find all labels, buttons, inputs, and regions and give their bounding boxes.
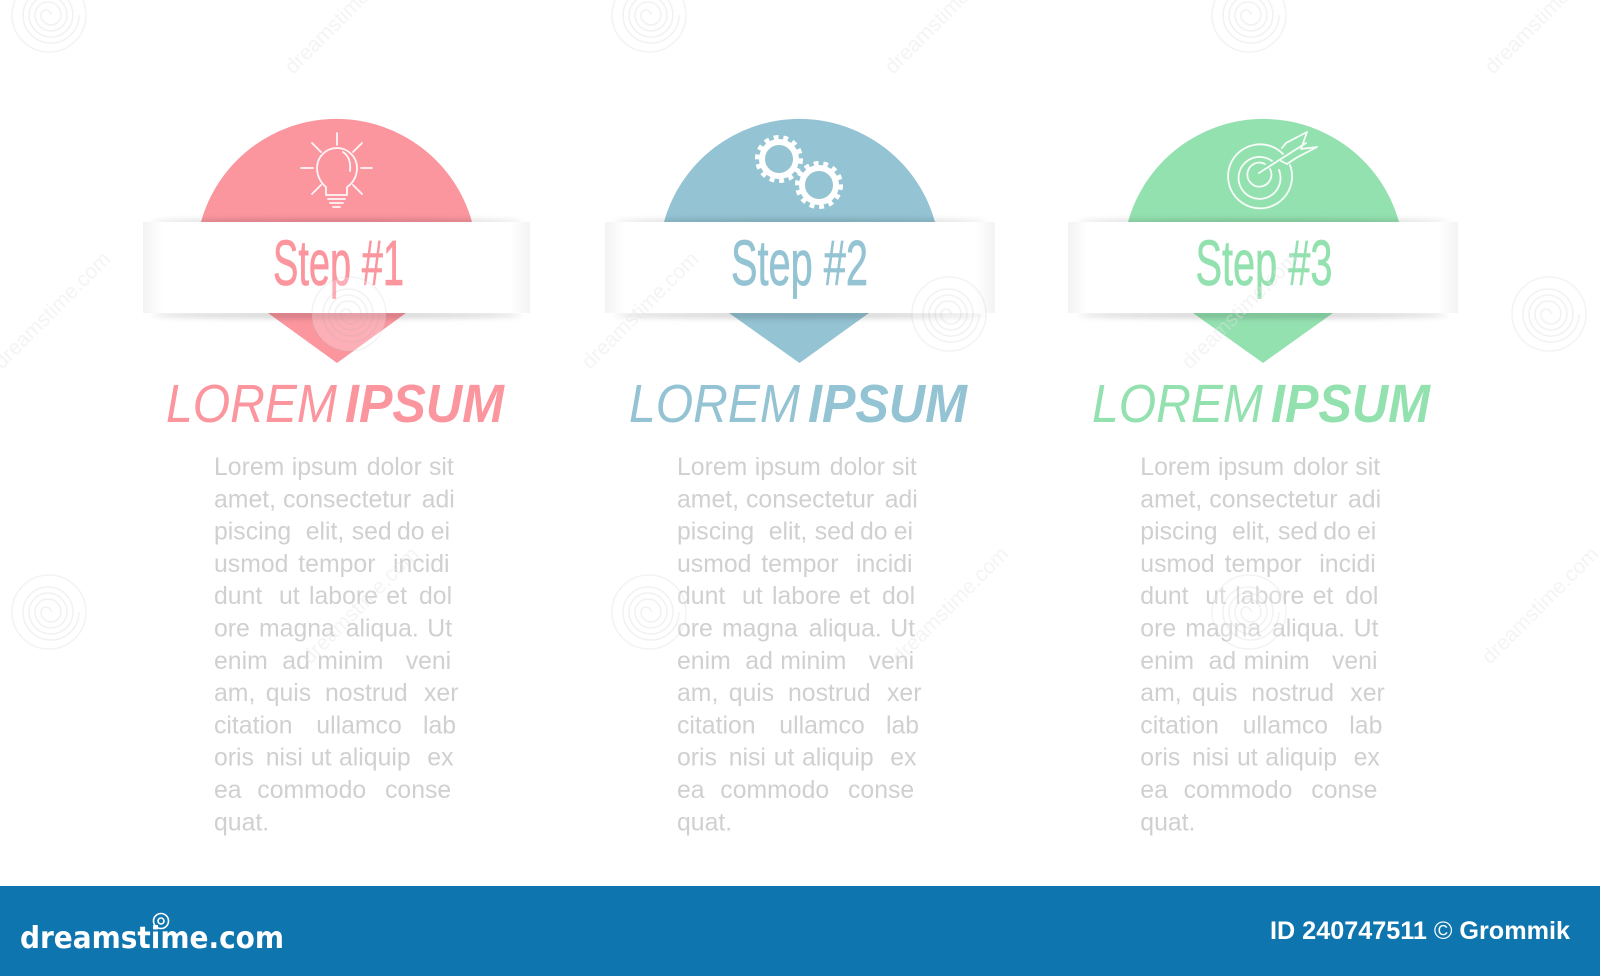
text block: step 3 body: enim [1140, 648, 1194, 675]
ribbon label: Step #2: Step #2 [731, 227, 868, 299]
text block: step 1 body: conse [385, 777, 451, 804]
text block: step 2 body: tempor [761, 551, 838, 578]
ribbon [605, 222, 995, 313]
ribbon shadows [152, 219, 522, 318]
text block: step 1 body: oris [214, 745, 254, 772]
text block: step 2 body: et [849, 583, 870, 610]
text block: step 3 body: quis [1192, 680, 1238, 707]
text block: step 2 body: enim [677, 648, 731, 675]
heading: step 1: IPSUM [345, 374, 505, 434]
text block: step 2 body: dol [882, 583, 915, 610]
text block: step 2 body: ut [774, 745, 794, 772]
watermark overlay: dreamstime.com [887, 543, 1013, 669]
panel: step 1 badge [143, 119, 530, 363]
text block: step 3 body: amet, [1140, 486, 1202, 513]
text block: step 3 body: dunt [1140, 583, 1189, 610]
text block: step 1 body: ei [431, 519, 450, 546]
text block: step 1 body: labore [309, 583, 378, 610]
text block: step 1 body: commodo [257, 777, 366, 804]
text block: step 3 body: consectetur [1209, 486, 1337, 513]
text block: step 1 body: usmod [214, 551, 288, 578]
text block: step 2 body: nisi [729, 745, 766, 772]
text block: step 1 body: ore [214, 616, 250, 642]
text block: step 2 body: labore [772, 583, 841, 610]
text block: step 1 body: lab [423, 712, 456, 739]
text block: step 1 body: am, [214, 680, 255, 707]
text block: step 1 body: sit [429, 454, 454, 481]
text block: step 1 body: ipsum [292, 454, 358, 481]
text block: step 2 body: consectetur [746, 486, 874, 513]
text block: step 2 body: nostrud [788, 680, 871, 707]
footer credit: ID 240747511 © Grommik [1270, 917, 1570, 945]
text block: step 3 body: sit [1355, 454, 1380, 481]
text block: step 3 body: dolor [1293, 454, 1348, 481]
text block: step 2 body: ei [894, 519, 913, 546]
watermark overlay: dreamstime.com [297, 543, 423, 669]
text block: step 1 body: amet, [214, 486, 276, 513]
ribbon shadows [615, 219, 985, 318]
text block: step 2 body [677, 454, 921, 836]
text block: step 3 body: incidi [1319, 551, 1376, 578]
text block: step 1 body: quis [266, 680, 311, 707]
text block: step 1 body: incidi [393, 551, 450, 578]
badge shape: pink circle segment and pointer [201, 119, 472, 363]
text block: step 1 body: ex [427, 745, 454, 772]
text block: step 2 body: ea [677, 777, 705, 804]
text block: step 3 body: aliqua. [1272, 616, 1345, 642]
text block: step 2 body: quis [729, 680, 774, 707]
text block: step 2 body: ore [677, 616, 713, 642]
badge shape: blue circle segment and pointer [664, 119, 935, 363]
heading: step 2 [629, 374, 968, 434]
footer bar [0, 886, 1600, 976]
text block: step 3 body: commodo [1184, 777, 1292, 804]
text block: step 3 body: nisi [1192, 745, 1229, 772]
text block: step 1 body: do [397, 519, 425, 546]
text block: step 3 body: adi [1348, 486, 1381, 513]
text block: step 2 body: quat. [677, 809, 732, 836]
text block: step 2 body: amet, [677, 486, 739, 513]
text block: step 2 body: oris [677, 745, 717, 772]
text block: step 1 body: dol [419, 583, 452, 610]
text block: step 2 body: aliqua. [809, 616, 882, 642]
text block: step 1 body: piscing [214, 519, 291, 546]
text block: step 3 body: ex [1354, 745, 1380, 772]
text block: step 2 body: sed [815, 519, 855, 546]
panel: step 2 badge [605, 119, 995, 363]
text block: step 2 body: xer [887, 680, 921, 707]
text block: step 3 body: usmod [1140, 551, 1215, 578]
text block: step 3 body: veni [1332, 648, 1378, 675]
ribbon shadows [1078, 219, 1448, 318]
text block: step 1 body: nostrud [325, 680, 408, 707]
footer logo: dreamstime.com [20, 921, 284, 956]
text block: step 1 body: minim [317, 648, 383, 675]
watermark overlay [0, 0, 1600, 669]
text block: step 1 body: tempor [298, 551, 375, 578]
text block: step 2 body: veni [869, 648, 914, 675]
text block: step 2 body: Ut [890, 616, 915, 642]
text block: step 3 body: do [1323, 519, 1351, 546]
text block: step 3 body: et [1313, 583, 1333, 610]
text block: step 1 body: ad [282, 648, 310, 675]
text block: step 2 body: magna [722, 616, 798, 642]
text block: step 3 body: am, [1140, 680, 1182, 707]
text block: step 1 body: xer [424, 680, 458, 707]
text block: step 3 body: xer [1350, 680, 1385, 707]
text block: step 1 body: ut [279, 583, 300, 610]
text block: step 1 body: dunt [214, 583, 262, 610]
watermark overlay: dreamstime.com [1477, 543, 1600, 669]
text block: step 1 body: nisi [266, 745, 303, 772]
text block: step 3 body: piscing [1140, 519, 1218, 546]
text block: step 2 body: elit, [769, 519, 807, 546]
text block: step 2 body: ex [890, 745, 917, 772]
text block: step 2 body: piscing [677, 519, 754, 546]
text block: step 2 body: adi [885, 486, 918, 513]
text block: step 2 body: dolor [830, 454, 885, 481]
text block: step 2 body: ut [742, 583, 763, 610]
text block: step 3 body: dol [1345, 583, 1378, 610]
text block: step 3 body: ea [1140, 777, 1168, 804]
text block: step 3 body: ad [1209, 648, 1236, 675]
text block: step 2 body: dunt [677, 583, 725, 610]
text block: step 3 body: citation [1140, 712, 1219, 739]
heading: step 1 [166, 374, 505, 434]
text block: step 2 body: do [860, 519, 888, 546]
text block: step 3 body: ore [1140, 616, 1176, 642]
text block: step 3 body: sed [1278, 519, 1318, 546]
text block: step 2 body: ullamco [779, 712, 865, 739]
text block: step 3 body: elit, [1232, 519, 1271, 546]
text block: step 1 body: Lorem [214, 454, 284, 481]
panel: step 3 badge [1068, 119, 1458, 363]
text block: step 3 body: Lorem [1140, 454, 1211, 481]
text block: step 1 body: consectetur [283, 486, 411, 513]
text block: step 1 body [214, 454, 458, 836]
ribbon [1068, 222, 1458, 313]
text block: step 1 body: ea [214, 777, 242, 804]
text block: step 3 body: tempor [1225, 551, 1302, 578]
text block: step 2 body: conse [848, 777, 914, 804]
icon: target with arrow [1228, 132, 1317, 208]
text block: step 3 body: minim [1244, 648, 1310, 675]
text block: step 2 body: sit [892, 454, 917, 481]
text block: step 2 body: lab [886, 712, 919, 739]
text block: step 3 body: ut [1205, 583, 1226, 610]
ribbon label: Step #1: Step #1 [273, 227, 404, 299]
heading: step 3 [1092, 374, 1431, 434]
heading: step 3: LOREM [1092, 374, 1263, 434]
text block: step 2 body: minim [780, 648, 846, 675]
text block: step 3 body [1140, 454, 1385, 836]
heading: step 3: IPSUM [1271, 374, 1431, 434]
watermark overlay: dreamstime.com [577, 248, 703, 374]
text block: step 2 body: citation [677, 712, 756, 739]
text block: step 1 body: enim [214, 648, 268, 675]
text block: step 1 body: dolor [367, 454, 422, 481]
text block: step 1 body: sed [352, 519, 392, 546]
text block: step 2 body: ad [745, 648, 773, 675]
text block: step 1 body: adi [422, 486, 455, 513]
text block: step 3 body: magna [1185, 616, 1261, 642]
badge shape: green circle segment and pointer [1128, 119, 1399, 363]
ribbon [143, 222, 530, 313]
text block: step 3 body: Ut [1354, 616, 1379, 642]
heading: step 2: LOREM [629, 374, 800, 434]
text block: step 1 body: magna [259, 616, 335, 642]
icon: light bulb [301, 133, 372, 207]
text block: step 3 body: ipsum [1218, 454, 1284, 481]
icon: gears [758, 138, 840, 206]
text block: step 3 body: aliquip [1265, 745, 1337, 772]
text block: step 2 body: usmod [677, 551, 751, 578]
text block: step 2 body: ipsum [755, 454, 821, 481]
text block: step 3 body: ullamco [1243, 712, 1328, 739]
ribbon label: Step #3: Step #3 [1196, 227, 1332, 299]
text block: step 3 body: conse [1311, 777, 1377, 804]
text block: step 3 body: nostrud [1251, 680, 1334, 707]
text block: step 1 body: citation [214, 712, 293, 739]
text block: step 2 body: commodo [720, 777, 829, 804]
text block: step 1 body: ut [311, 745, 331, 772]
text block: step 2 body: Lorem [677, 454, 747, 481]
text block: step 1 body: et [386, 583, 407, 610]
text block: step 1 body: veni [406, 648, 451, 675]
heading: step 1: LOREM [166, 374, 337, 434]
watermark overlay: dreamstime.com [1177, 248, 1303, 374]
text block: step 3 body: quat. [1140, 809, 1195, 836]
text block: step 3 body: ei [1357, 519, 1376, 546]
icon: logo spiral [154, 914, 168, 928]
text block: step 3 body: ut [1237, 745, 1258, 772]
text block: step 1 body: elit, [306, 519, 344, 546]
text block: step 1 body: aliquip [339, 745, 411, 772]
text block: step 3 body: oris [1140, 745, 1180, 772]
text block: step 3 body: labore [1235, 583, 1304, 610]
text block: step 2 body: incidi [856, 551, 913, 578]
heading: step 2: IPSUM [808, 374, 968, 434]
text block: step 1 body: ullamco [316, 712, 402, 739]
text block: step 1 body: quat. [214, 809, 269, 836]
text block: step 1 body: aliqua. [346, 616, 419, 642]
text block: step 2 body: aliquip [802, 745, 874, 772]
text block: step 2 body: am, [677, 680, 718, 707]
text block: step 3 body: lab [1349, 712, 1382, 739]
text block: step 1 body: Ut [427, 616, 452, 642]
